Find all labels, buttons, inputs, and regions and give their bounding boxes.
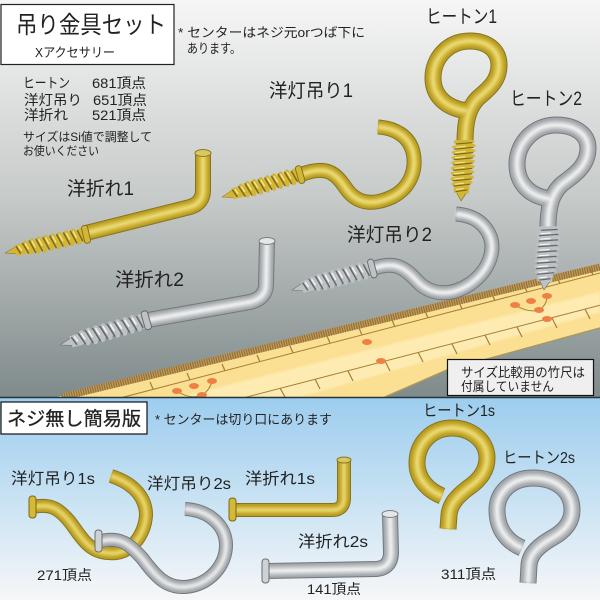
vertex count: 311: 311頂点 <box>441 566 496 582</box>
labels: S-hook simple: 洋灯吊り2s <box>147 475 231 493</box>
title box: Xアクセサリー <box>35 45 115 60</box>
section heading box: ネジ無し簡易版 <box>7 408 141 430</box>
hook: silver eye screw <box>517 125 588 291</box>
note: centre at cut end: * センターは切り口にあります <box>155 412 332 427</box>
ruler disclaimer box: サイズ比較用の竹尺は <box>461 365 585 380</box>
label: 洋折れ1s: 洋折れ1s <box>245 470 315 488</box>
note: centre position: * センターはネジ元orつば下に <box>178 25 365 40</box>
title box: 吊り金具セット <box>16 12 166 39</box>
hook: silver S-hook screw <box>290 214 492 299</box>
vertex counts list: 651頂点 <box>93 92 147 108</box>
label: ヒートン2: ヒートン2 <box>510 89 582 110</box>
bamboo ruler <box>57 265 600 398</box>
vertex counts list: 洋折れ <box>24 107 68 123</box>
label: 洋折れ2: 洋折れ2 <box>115 269 184 291</box>
hook: silver eye simple <box>497 478 572 583</box>
size note <box>23 129 152 158</box>
hook: gold L-bend screw <box>3 150 211 262</box>
hook: gold S-hook simple <box>29 476 146 553</box>
hook: silver L-bend screw <box>57 238 275 354</box>
hook: gold L-bend simple <box>229 457 351 521</box>
label: ヒートン2s: ヒートン2s <box>503 450 575 467</box>
bottom panel: simplified no-thread versions <box>0 398 600 600</box>
vertex counts list: 521頂点 <box>92 107 146 123</box>
ruler disclaimer box <box>448 360 594 396</box>
label: 洋折れ2s: 洋折れ2s <box>298 533 368 551</box>
label: ヒートン1: ヒートン1 <box>426 7 497 28</box>
label: 洋折れ1: 洋折れ1 <box>67 178 134 200</box>
hook: gold S-hook screw <box>220 127 414 206</box>
vertex count: 271: 271頂点 <box>37 567 92 583</box>
labels: S-hook simple: 洋灯吊り1s <box>11 470 95 488</box>
top panel: screw-type hardware set <box>0 0 600 398</box>
label: 洋灯吊り1: 洋灯吊り1 <box>269 80 353 102</box>
label: 洋灯吊り2: 洋灯吊り2 <box>347 224 432 246</box>
labels: S-hook simple <box>11 470 231 493</box>
size note: サイズはSi値で調整して <box>23 129 152 144</box>
vertex counts list <box>23 75 147 123</box>
vertex count: 141: 141頂点 <box>307 581 361 597</box>
hook: silver S-hook simple <box>95 509 226 587</box>
note: centre position: あります。 <box>187 41 241 56</box>
label: ヒートン1s: ヒートン1s <box>423 403 495 420</box>
vertex counts list: 681頂点 <box>92 75 146 91</box>
bottom panel background <box>0 398 600 600</box>
hook: silver L-bend simple <box>262 510 398 583</box>
hook: gold eye screw <box>433 41 499 201</box>
title box <box>1 4 174 64</box>
top panel background <box>0 0 600 398</box>
section heading box <box>1 402 147 434</box>
vertex counts list: 洋灯吊り <box>24 92 82 108</box>
note: centre position <box>178 25 365 56</box>
ruler disclaimer box: 付属していません <box>461 379 554 394</box>
size note: お使いください <box>23 143 99 158</box>
hook: gold eye simple <box>417 428 487 529</box>
vertex counts list: ヒートン <box>23 75 70 91</box>
